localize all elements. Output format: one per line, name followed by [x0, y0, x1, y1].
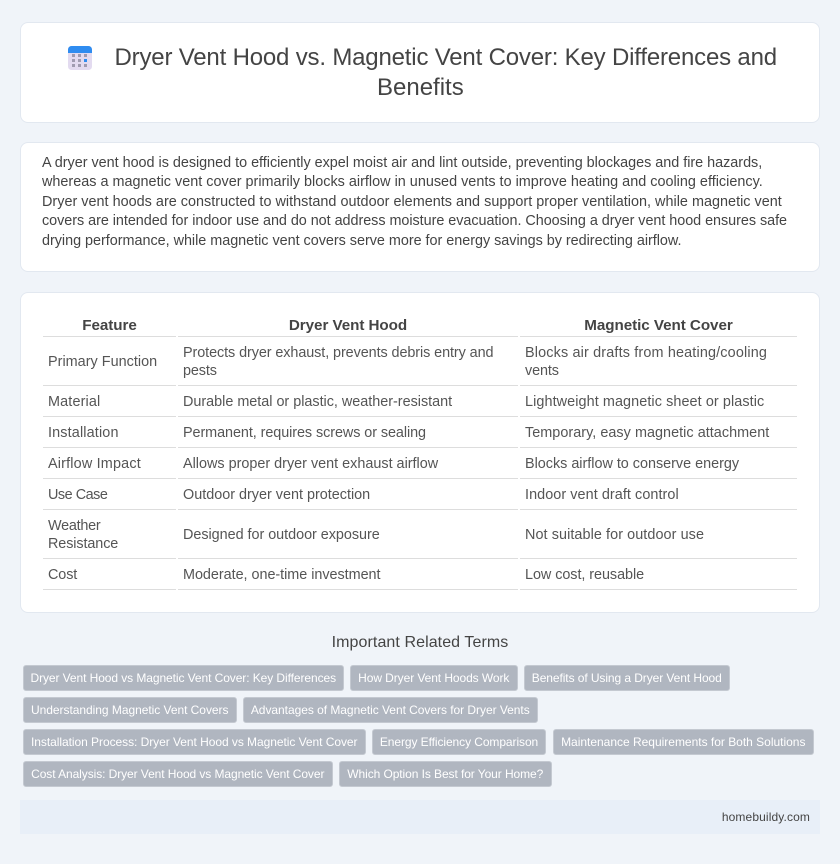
- row: use case: [48, 487, 679, 503]
- row: airflow impact: Airflow Impact: [48, 456, 141, 472]
- related term tags: Energy Efficiency Comparison: [380, 735, 538, 749]
- row: airflow impact: Allows proper dryer vent exhaust airflow: [183, 456, 438, 472]
- footer: homebuildy.com: [722, 810, 810, 824]
- related term tags: [23, 665, 814, 787]
- row: airflow impact: [48, 456, 739, 472]
- row: primary function: pests: [183, 363, 217, 379]
- text block: introduction: [42, 155, 787, 249]
- panel: comparison table: [20, 292, 820, 613]
- text block: introduction: Dryer vent hoods are constructed to withstand outdoor elements and support proper ventilation, while magnetic vent: [42, 194, 782, 210]
- row: primary function: vents: [525, 363, 559, 379]
- row: use case: Use Case: [48, 487, 107, 503]
- text block: introduction: drying performance, while magnetic vent covers serve more for energy savings by redirecting airflow.: [42, 233, 681, 249]
- row: installation: Installation: [48, 425, 119, 441]
- text block: introduction: A dryer vent hood is designed to efficiently expel moist air and lint outside, preventing blockages and fire hazards,: [42, 155, 762, 171]
- row: cost: Low cost, reusable: [525, 567, 644, 583]
- row: weather resistance: Weather: [48, 518, 100, 534]
- text block: introduction: covers are intended for indoor use and do not address moisture evacuation. Choosing a dryer vent hood ensures safe: [42, 213, 787, 229]
- row: material: Lightweight magnetic sheet or plastic: [525, 394, 764, 410]
- table header: Feature: [82, 317, 137, 334]
- row: installation: [48, 425, 770, 441]
- row: cost: Moderate, one-time investment: [183, 567, 380, 583]
- related term tags: Benefits of Using a Dryer Vent Hood: [532, 671, 722, 685]
- row: use case: Outdoor dryer vent protection: [183, 487, 370, 503]
- related term tags: Maintenance Requirements for Both Solutions: [561, 735, 805, 749]
- row: primary function: Primary Function: [48, 354, 157, 370]
- row: weather resistance: Designed for outdoor exposure: [183, 527, 380, 543]
- related term tags: Dryer Vent Hood vs Magnetic Vent Cover: Key Differences: [30, 671, 336, 685]
- title: Benefits: [377, 74, 464, 101]
- panel: introduction: [20, 142, 820, 272]
- footer: [20, 800, 820, 834]
- heading: important related terms: Important Related Terms: [332, 634, 508, 651]
- row: airflow impact: Blocks airflow to conserve energy: [525, 456, 739, 472]
- table header: [82, 317, 733, 334]
- row: weather resistance: Not suitable for outdoor use: [525, 527, 704, 543]
- related term tags: Understanding Magnetic Vent Covers: [31, 703, 228, 717]
- row: primary function: [48, 345, 767, 379]
- row: material: [48, 394, 764, 410]
- related term tags: Advantages of Magnetic Vent Covers for Dryer Vents: [251, 703, 530, 717]
- panel: header: [20, 22, 820, 123]
- row: material: Material: [48, 394, 100, 410]
- row: primary function: Protects dryer exhaust, prevents debris entry and: [183, 345, 493, 361]
- table header: Dryer Vent Hood: [289, 317, 407, 334]
- related term tags: Cost Analysis: Dryer Vent Hood vs Magnetic Vent Cover: [31, 767, 324, 781]
- comparison table: [43, 317, 797, 590]
- row: cost: Cost: [48, 567, 77, 583]
- text block: introduction: whereas a magnetic vent cover primarily blocks airflow in unused vents to improve heating and cooling efficiency.: [42, 174, 763, 190]
- row: cost: [48, 567, 644, 583]
- row: primary function: Blocks air drafts from heating/cooling: [525, 345, 767, 361]
- related term tags: How Dryer Vent Hoods Work: [358, 671, 509, 685]
- table header: Magnetic Vent Cover: [584, 317, 733, 334]
- row: weather resistance: Resistance: [48, 536, 118, 552]
- icon: calendar: [68, 46, 92, 70]
- title: Dryer Vent Hood vs. Magnetic Vent Cover: Key Differences and: [114, 44, 777, 71]
- row: installation: Temporary, easy magnetic attachment: [525, 425, 769, 441]
- row: installation: Permanent, requires screws or sealing: [183, 425, 426, 441]
- title: [114, 44, 777, 101]
- row: material: Durable metal or plastic, weather-resistant: [183, 394, 452, 410]
- row: use case: Indoor vent draft control: [525, 487, 679, 503]
- row: weather resistance: [48, 518, 704, 552]
- related term tags: Which Option Is Best for Your Home?: [347, 767, 543, 781]
- related term tags: Installation Process: Dryer Vent Hood vs Magnetic Vent Cover: [31, 735, 358, 749]
